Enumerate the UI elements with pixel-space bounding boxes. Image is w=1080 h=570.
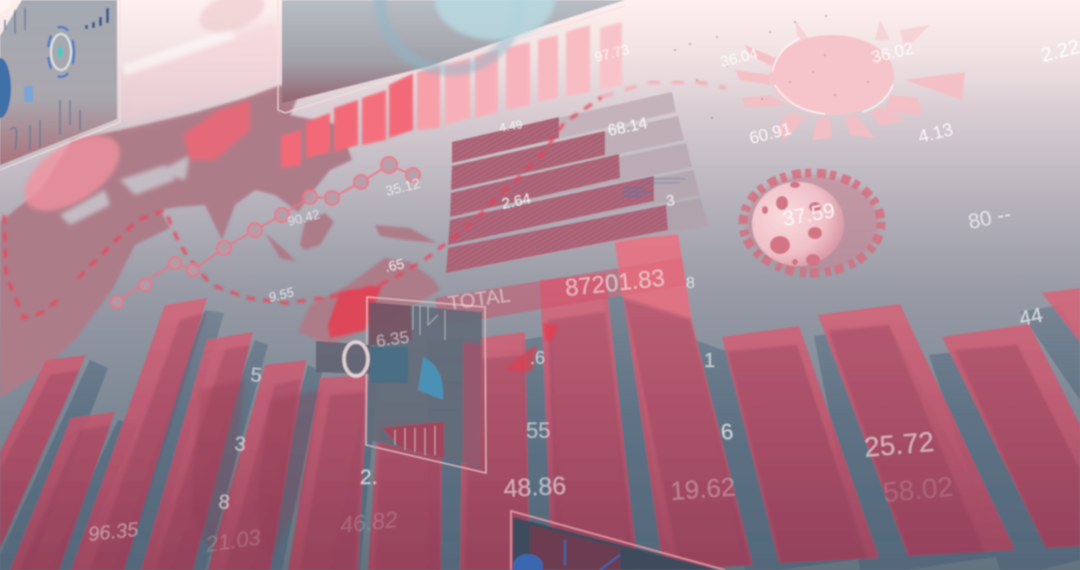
number labels: 6 (719, 418, 735, 445)
row 1 (452, 92, 676, 163)
red map pieces (328, 285, 559, 372)
number labels: 6.35 (375, 328, 410, 351)
number labels: 36.02 (870, 39, 915, 67)
bright pink bar head (614, 233, 692, 318)
row 3 (450, 143, 692, 217)
pie chart (418, 357, 443, 400)
red head of panel (369, 302, 412, 345)
mini columns (85, 8, 109, 29)
pale dashed line (602, 82, 726, 97)
number labels: 4.13 (916, 119, 955, 147)
horizontal hatched bar chart (446, 92, 709, 273)
number labels: 48.86 (503, 472, 567, 503)
top pink bar chart (281, 22, 622, 168)
number labels: 3 (665, 192, 676, 210)
number labels: 21.03 (203, 524, 263, 557)
number labels: 90.42 (286, 206, 321, 229)
number labels: 60.91 (747, 119, 793, 148)
number labels: 25.72 (863, 426, 935, 463)
dark map texture on bars (190, 380, 320, 560)
number labels: 68.14 (606, 115, 649, 140)
line with circular markers (111, 157, 420, 308)
number labels: 44 (1017, 303, 1045, 331)
red dashed line (4, 97, 602, 318)
icon: small square (24, 86, 33, 102)
number labels: 1 (704, 350, 715, 372)
number labels: 9.55 (267, 284, 296, 305)
bottom red circuit (382, 422, 444, 458)
red bars (0, 235, 1080, 570)
number labels: .6 (530, 348, 545, 368)
number labels: 97.73 (593, 41, 631, 65)
top centre dashboard panel (278, 0, 625, 113)
virus: flat outline (735, 20, 965, 140)
inner darker bar shading (0, 300, 1080, 570)
small scattered dots (674, 15, 869, 119)
icon: radial gauge (48, 27, 74, 77)
number labels: 4.49 (498, 117, 524, 135)
blue square (370, 347, 408, 383)
left dark tag with ring (316, 341, 370, 376)
map gaps (60, 155, 190, 225)
number labels: 8 (217, 491, 231, 514)
white mosaic band (122, 28, 236, 76)
number labels: 46.82 (339, 506, 399, 538)
number labels: 8 (686, 275, 695, 292)
world map (0, 85, 440, 398)
number labels: .65 (383, 255, 406, 275)
circuit lines top (413, 305, 445, 340)
number labels: 55 (526, 418, 550, 443)
small data text block (623, 178, 685, 197)
number labels: 19.62 (669, 472, 736, 506)
number labels: 36.04 (719, 45, 759, 71)
total band (435, 258, 686, 326)
bottom dashboard panel (511, 511, 725, 570)
centre dashboard panel (366, 297, 486, 473)
bar shadows (0, 295, 1080, 570)
pink map ellipse (11, 120, 133, 226)
faint virus top (194, 0, 270, 41)
icon: blue half circle (0, 58, 11, 118)
number labels: 87201.83 (564, 265, 666, 302)
top-left dashboard panel (0, 0, 120, 170)
bright map patch (183, 100, 250, 160)
number labels: 80 -- (966, 202, 1013, 234)
number labels: 37.59 (781, 199, 837, 231)
pale pink haze band (120, 20, 285, 125)
right strip (463, 342, 482, 465)
row 4 (448, 170, 700, 245)
number labels: 2. (360, 466, 378, 489)
number labels: 2.64 (500, 190, 532, 213)
number labels: 5 (249, 364, 263, 387)
number labels: 96.35 (87, 519, 140, 546)
virus: textured sphere (743, 173, 881, 273)
number labels: 58.02 (882, 471, 954, 508)
number labels: TOTAL (447, 284, 512, 315)
circuit strokes (5, 8, 80, 150)
number labels: 35.12 (384, 175, 422, 199)
blue ring (380, 0, 555, 70)
number labels: 3 (233, 433, 247, 456)
row 5 (446, 198, 709, 273)
row 2 (451, 116, 684, 190)
